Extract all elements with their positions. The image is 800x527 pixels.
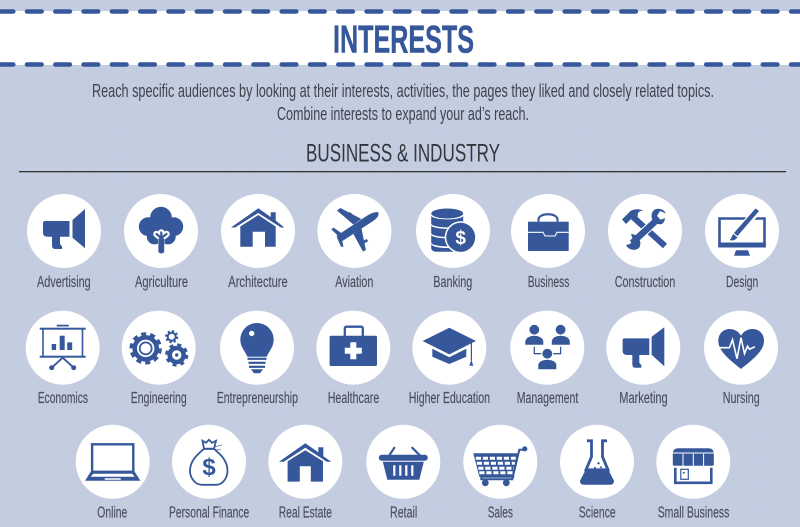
intro text — [92, 80, 714, 124]
item: Online: Online — [97, 504, 127, 521]
item: Sales: Sales — [488, 504, 513, 521]
item: Management: Management — [517, 390, 579, 407]
item: Science — [560, 425, 634, 521]
item: Higher Education: Higher Education — [409, 390, 490, 407]
item: Science: Science — [579, 504, 616, 521]
item: Banking — [416, 194, 490, 291]
item: Architecture: Architecture — [228, 274, 288, 291]
item: Engineering — [122, 311, 196, 407]
item: Architecture — [221, 194, 295, 291]
item: Construction — [608, 194, 682, 291]
item: Advertising: Advertising — [37, 274, 91, 291]
item: Aviation — [317, 194, 391, 291]
section heading: business & industry: BUSINESS & INDUSTRY — [306, 140, 500, 168]
item: Entrepreneurship — [217, 311, 298, 407]
item: Retail — [366, 425, 440, 521]
item: Aviation: Aviation — [335, 274, 373, 291]
item: Engineering: Engineering — [131, 390, 187, 407]
item: Personal Finance: $ — [202, 454, 216, 481]
item: Nursing — [704, 311, 778, 407]
intro text: Combine interests to expand your ad’s reach. — [277, 103, 529, 124]
item: Agriculture: Agriculture — [135, 274, 188, 291]
item: Personal Finance — [169, 425, 249, 521]
header band — [0, 11, 800, 65]
item: Higher Education — [409, 311, 490, 407]
item: Economics: Economics — [38, 390, 88, 407]
item: Retail: Retail — [390, 504, 417, 521]
item: Advertising — [27, 194, 101, 291]
item: Marketing: Marketing — [619, 390, 668, 407]
item: Real Estate: Real Estate — [279, 504, 332, 521]
item: Business: Business — [528, 274, 570, 291]
item: Online — [76, 425, 150, 521]
item: Design: Design — [726, 274, 758, 291]
item: Design — [705, 194, 779, 291]
item: Nursing: Nursing — [723, 390, 760, 407]
item: Marketing — [606, 311, 680, 407]
item: Personal Finance: Personal Finance — [169, 504, 249, 521]
item: Management — [510, 311, 584, 407]
item: Sales — [463, 425, 537, 521]
item: Healthcare — [316, 311, 390, 407]
item: Agriculture — [124, 194, 198, 291]
item: Healthcare: Healthcare — [328, 390, 379, 407]
item: Banking: Banking — [433, 274, 472, 291]
item: Business — [511, 194, 585, 291]
item: Banking: $ — [455, 228, 466, 249]
title: INTERESTS — [333, 18, 474, 61]
item: Construction: Construction — [615, 274, 675, 291]
item: Entrepreneurship: Entrepreneurship — [217, 390, 298, 407]
item: Real Estate — [268, 425, 342, 521]
item: Small Business: Small Business — [658, 504, 730, 521]
item: Small Business — [656, 425, 730, 521]
item: Economics — [26, 311, 100, 407]
